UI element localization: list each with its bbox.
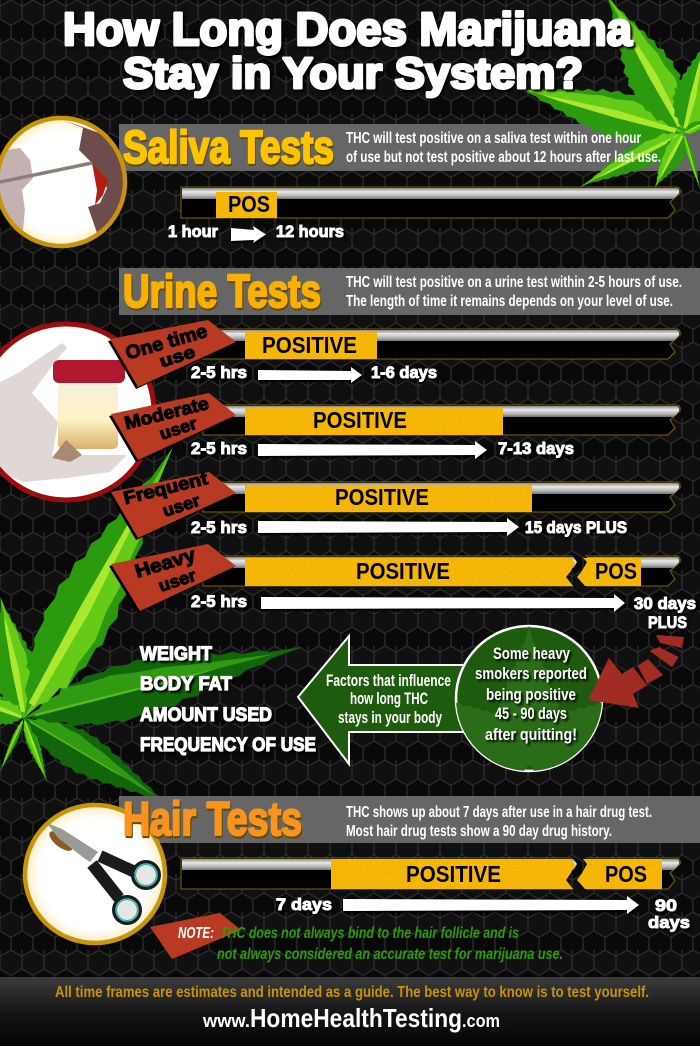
callout: heavy smokers: Some heavy — [493, 644, 570, 663]
frequent user time labels and arrow: 2-5 hrs — [191, 518, 247, 537]
icon: leaf watermark — [456, 626, 602, 771]
note: hair follicle: THC does not always bind to the hair follicle and is — [220, 925, 519, 942]
footer: .com — [462, 1011, 500, 1031]
tag: one time use: use — [157, 342, 197, 371]
heavy user time labels and arrow — [191, 592, 696, 632]
heading: saliva tests: Saliva Tests — [123, 121, 334, 173]
icon: urine cup photo — [0, 324, 154, 500]
bar: saliva timeline — [181, 187, 680, 218]
banner: hair — [119, 796, 700, 843]
icon: saliva swab photo — [0, 118, 127, 246]
title: How Long Does Marijuana — [63, 3, 632, 55]
icon: top right cannabis leaf — [511, 0, 700, 199]
text: urine description — [346, 274, 682, 310]
tag: heavy user — [109, 544, 236, 613]
panel: hair tests — [25, 792, 690, 963]
bar: hair timeline: POSITIVE — [406, 861, 501, 887]
one time use time labels and arrow: 1-6 days — [371, 363, 437, 382]
callout: heavy smokers: smokers reported — [475, 664, 587, 683]
list: factors: WEIGHT — [140, 644, 212, 665]
saliva time labels and arrow: 1 hour — [168, 222, 218, 241]
arrow: factors that influence: how long THC — [350, 689, 428, 708]
bar: hair timeline — [181, 857, 680, 890]
heading: hair tests: Hair Tests — [123, 792, 302, 845]
tag: one time use — [108, 320, 236, 389]
panel: saliva tests — [0, 118, 680, 246]
arrow: red dashed arrow — [588, 635, 684, 708]
icon: left cannabis leaf — [0, 431, 310, 823]
list: factors: AMOUNT USED — [140, 705, 272, 726]
callout: heavy smokers: 45 - 90 days — [495, 704, 567, 723]
callout: heavy smokers — [454, 624, 604, 772]
note: hair follicle — [150, 913, 563, 963]
heavy user time labels and arrow: 2-5 hrs — [191, 592, 247, 611]
bar: heavy user — [203, 555, 680, 587]
list: factors — [140, 644, 316, 756]
bar: one time use: POSITIVE — [262, 332, 357, 358]
heading: urine tests: Urine Tests — [123, 265, 321, 317]
bar: heavy user: POSITIVE — [356, 558, 450, 584]
note: hair follicle: not always considered an accurate test for marijuana use. — [217, 946, 563, 963]
footer: HomeHealthTesting — [250, 1003, 462, 1033]
bar: heavy user: POS — [595, 558, 637, 584]
callout: heavy smokers: after quitting! — [485, 725, 577, 744]
footer: www. — [202, 1011, 250, 1031]
list: factors: BODY FAT — [140, 674, 232, 695]
footer — [0, 977, 700, 1046]
heavy user time labels and arrow: PLUS — [648, 613, 687, 632]
bar: saliva timeline: POS — [228, 191, 270, 217]
hair time labels and arrow: days — [648, 913, 690, 932]
bar: hair timeline: POS — [605, 861, 647, 887]
tag: heavy user: user — [156, 566, 199, 596]
bar: frequent user — [203, 482, 680, 512]
moderate user time labels and arrow: 7-13 days — [498, 439, 574, 458]
tag: frequent user: user — [160, 491, 203, 521]
one time use time labels and arrow — [191, 363, 437, 383]
banner: urine — [119, 268, 700, 315]
title — [63, 3, 632, 98]
hair time labels and arrow — [276, 895, 690, 932]
bar: moderate user — [203, 405, 680, 435]
tag: moderate user — [109, 393, 236, 462]
tag: moderate user: user — [157, 414, 200, 444]
arrow: factors that influence: Factors that influence — [326, 671, 451, 690]
bar: moderate user: POSITIVE — [313, 407, 407, 433]
banner: saliva — [119, 124, 700, 171]
frequent user time labels and arrow — [191, 518, 627, 537]
note: hair follicle: NOTE: — [178, 925, 214, 942]
text: hair description — [346, 804, 652, 840]
bar: one time use — [203, 329, 680, 359]
hair time labels and arrow: 7 days — [276, 895, 332, 914]
tag: frequent user: Frequent — [121, 468, 210, 508]
tag: moderate user: Moderate — [122, 393, 211, 433]
moderate user time labels and arrow: 2-5 hrs — [191, 439, 247, 458]
arrow: factors that influence — [298, 636, 468, 764]
frequent user time labels and arrow: 15 days PLUS — [525, 518, 627, 537]
icon: scissors photo — [25, 805, 165, 943]
arrow: factors that influence: stays in your body — [338, 708, 442, 727]
bar: frequent user: POSITIVE — [335, 484, 429, 510]
heavy user time labels and arrow: 30 days — [634, 594, 696, 613]
hair time labels and arrow: 90 — [655, 896, 677, 915]
list: factors: FREQUENCY OF USE — [140, 735, 316, 756]
saliva time labels and arrow: 12 hours — [276, 222, 344, 241]
text: saliva description — [346, 130, 661, 166]
tag: heavy user: Heavy — [133, 544, 199, 583]
panel: urine tests — [0, 265, 696, 632]
saliva time labels and arrow — [168, 222, 344, 243]
title: Stay in Your System? — [123, 49, 583, 98]
callout: heavy smokers: being positive — [486, 685, 576, 704]
one time use time labels and arrow: 2-5 hrs — [191, 363, 247, 382]
tag: one time use: One time — [123, 321, 210, 364]
moderate user time labels and arrow — [191, 439, 574, 459]
tag: frequent user — [109, 468, 236, 540]
